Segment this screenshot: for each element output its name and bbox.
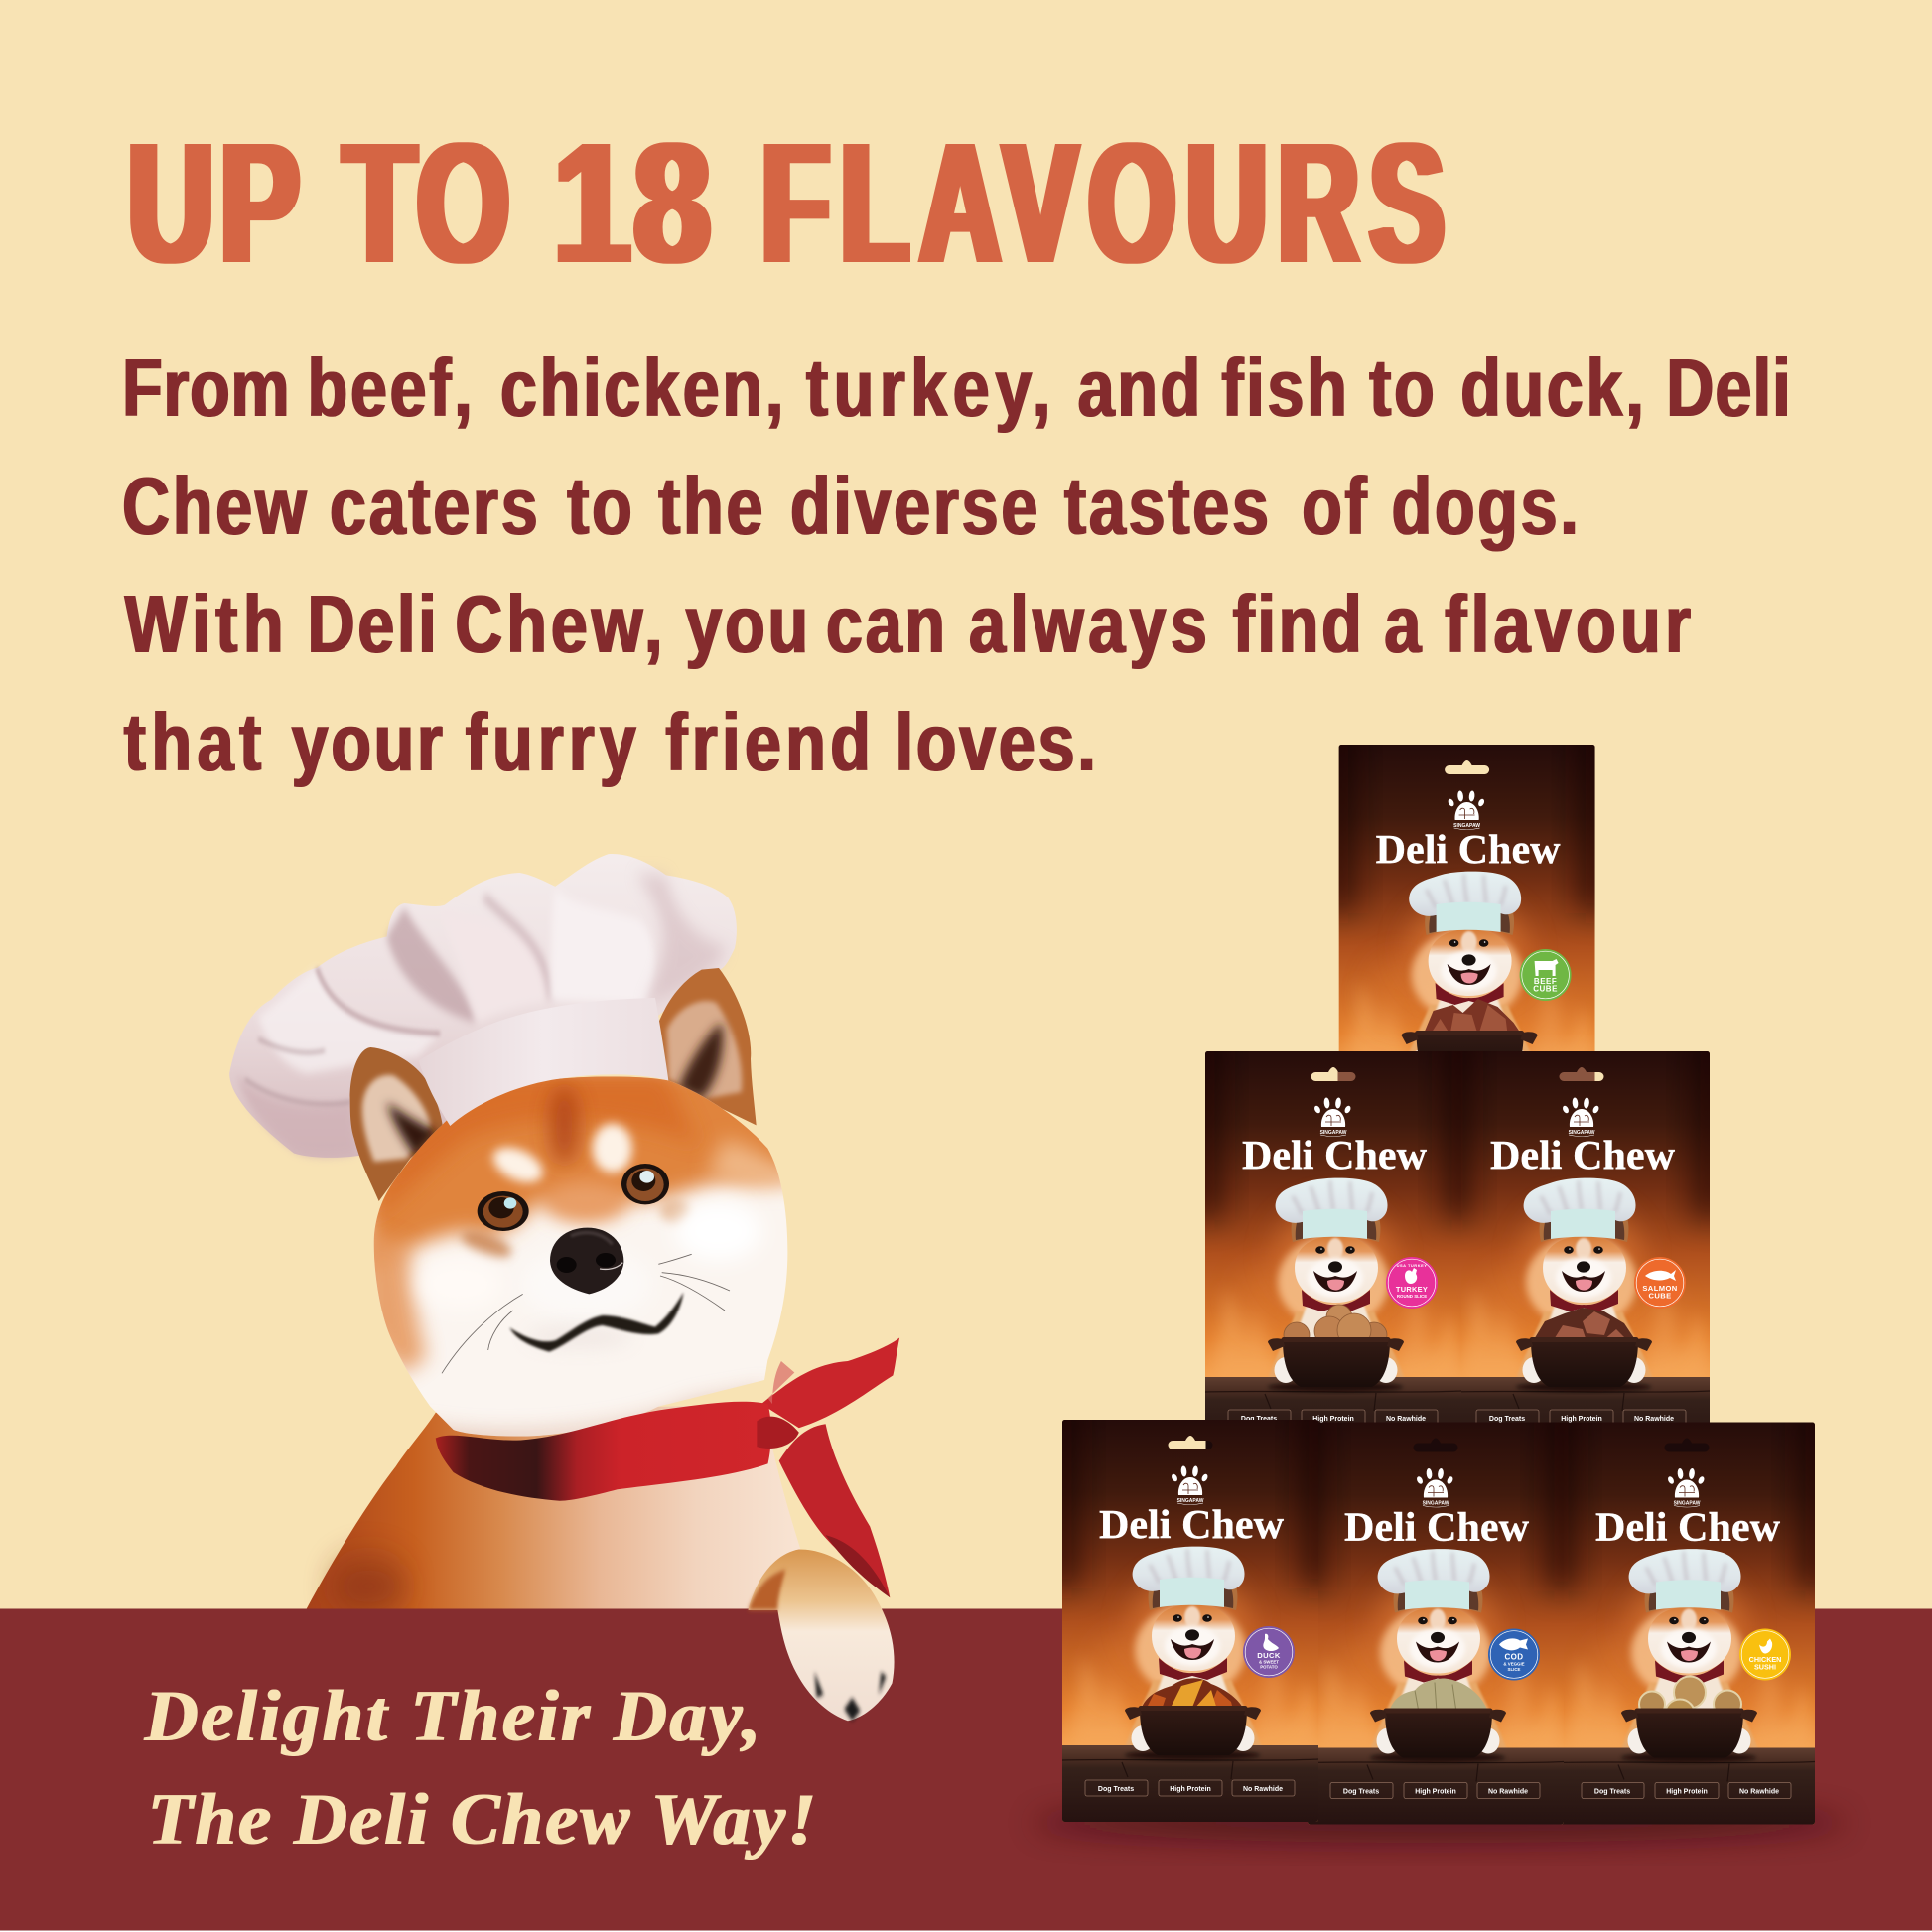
dog head <box>350 968 797 1456</box>
title: TO <box>344 107 509 299</box>
food: chicken sushi <box>1639 1676 1741 1729</box>
brand logo <box>1562 1097 1600 1136</box>
flavour badge: salmon cube: CUBE <box>1648 1291 1672 1301</box>
pack: cod and veggie slice (bottom middle) <box>1288 1402 1584 1825</box>
hang hole <box>1559 1067 1604 1081</box>
claim chips: No Rawhide <box>1739 1789 1779 1795</box>
right ear <box>658 968 757 1125</box>
claim chips <box>1362 1105 1572 1121</box>
burgundy band <box>0 1608 1932 1930</box>
flavour badge: chicken sushi: SUSHI <box>1754 1662 1776 1672</box>
illustration: shiba chef dog body and hat <box>229 854 817 1615</box>
claim chips: High Protein <box>1666 1789 1708 1795</box>
head fur <box>373 1076 788 1437</box>
dog paw over band <box>748 1549 895 1721</box>
body text: the <box>658 460 786 552</box>
hat band <box>419 998 668 1126</box>
dog nose <box>550 1228 623 1294</box>
flavour badge: duck and sweet potato: DUCK <box>1257 1651 1281 1660</box>
body text: Deli <box>1666 342 1792 434</box>
claim chips <box>1582 1783 1791 1799</box>
body text: find <box>1233 578 1386 670</box>
body text: caters <box>330 460 562 552</box>
body text: can <box>826 578 969 670</box>
hang hole <box>1311 1067 1356 1081</box>
brand logo <box>1667 1468 1706 1507</box>
body text: furry <box>466 696 665 788</box>
body text: a <box>1384 578 1445 670</box>
dog mouth and whiskers <box>442 1254 730 1373</box>
claim chips: High Protein <box>1447 1111 1487 1118</box>
claim chips: High Protein <box>1312 1416 1354 1423</box>
body text: Chew, <box>455 578 689 670</box>
pack: beef cube (top) <box>1319 725 1615 1147</box>
flavour badge: salmon cube <box>1634 1257 1686 1309</box>
product stack shadow <box>1033 1803 1847 1843</box>
body text: and <box>1078 342 1224 434</box>
food: cod slices <box>1389 1678 1488 1712</box>
body text: beef, <box>308 342 496 434</box>
body text: that <box>124 696 291 788</box>
product name: Deli Chew <box>1595 1503 1780 1549</box>
dog body <box>305 1404 817 1615</box>
brand logo: SINGAPAW <box>1453 823 1480 829</box>
claim chips: High Protein <box>1170 1786 1211 1793</box>
food: beef cubes <box>1424 999 1522 1035</box>
product name: Deli Chew <box>1099 1501 1284 1547</box>
flavour badge: turkey round slice: USA TURKEY <box>1397 1263 1427 1268</box>
body text: With <box>125 578 313 670</box>
pack: duck and sweet potato (bottom left) <box>1042 1400 1338 1822</box>
food: salmon cubes <box>1533 1308 1636 1341</box>
flavour badge: beef cube: CUBE <box>1533 985 1558 993</box>
body text: to <box>1369 342 1458 434</box>
body text: duck, <box>1460 342 1668 434</box>
brand logo <box>1313 1097 1352 1136</box>
brand logo <box>1416 1468 1454 1507</box>
claim chips: Dog Treats <box>1375 1111 1411 1118</box>
claim chips: No Rawhide <box>1634 1416 1674 1423</box>
product name: Deli Chew <box>1344 1503 1529 1549</box>
tagline: Delight Their Day, <box>144 1676 762 1757</box>
claim chips: High Protein <box>1415 1789 1456 1795</box>
flavour badge: beef cube: BEEF <box>1534 977 1557 986</box>
claim chips: Dog Treats <box>1098 1786 1134 1793</box>
body text: dogs. <box>1392 460 1582 552</box>
claim chips: No Rawhide <box>1243 1786 1283 1793</box>
claim chips <box>1228 1410 1438 1426</box>
brand logo <box>1171 1465 1209 1505</box>
title <box>128 106 1445 300</box>
flavour badge: beef cube <box>1520 949 1572 1001</box>
product name: Deli Chew <box>1490 1132 1675 1177</box>
body text: to <box>567 460 656 552</box>
body text: diverse <box>790 460 1061 552</box>
body text: Chew <box>122 460 331 552</box>
claim chips: Dog Treats <box>1594 1789 1630 1795</box>
body text: tastes <box>1064 460 1293 552</box>
claim chips: No Rawhide <box>1386 1416 1426 1423</box>
body text <box>122 342 1792 788</box>
body text: flavour <box>1445 578 1695 670</box>
tagline: The Deli Chew Way! <box>148 1779 818 1861</box>
hang hole <box>1414 1438 1457 1451</box>
brand logo: SINGAPAW <box>1674 1501 1701 1507</box>
flavour badge: salmon cube: SALMON <box>1642 1284 1678 1293</box>
flavour badge: cod and veggie slice <box>1488 1628 1540 1680</box>
claim chips: High Protein <box>1561 1416 1602 1423</box>
claim chips: No Rawhide <box>1488 1789 1528 1795</box>
chef hat <box>229 854 737 1158</box>
claim chips <box>1085 1780 1295 1796</box>
claim chips <box>1476 1410 1686 1426</box>
title: UP <box>128 107 300 299</box>
flavour badge: turkey round slice: ROUND SLICE <box>1397 1294 1427 1299</box>
body text: your <box>292 696 467 788</box>
body text: chicken, <box>500 342 807 434</box>
body text: of <box>1302 460 1391 552</box>
product name: Deli Chew <box>1242 1132 1427 1177</box>
hang hole <box>1168 1436 1213 1449</box>
pack: chicken sushi (bottom right) <box>1539 1402 1835 1825</box>
flavour badge: chicken sushi <box>1739 1628 1791 1680</box>
tagline <box>144 1676 818 1861</box>
body text: loves. <box>896 696 1099 788</box>
body text: friend <box>665 696 897 788</box>
title: 18 <box>554 107 711 300</box>
brand logo: SINGAPAW <box>1177 1498 1204 1504</box>
brand logo: SINGAPAW <box>1423 1501 1449 1507</box>
red neckerchief <box>436 1338 899 1597</box>
brand logo: SINGAPAW <box>1569 1130 1595 1136</box>
brand logo: SINGAPAW <box>1320 1130 1347 1136</box>
flavour badge: chicken sushi: CHICKEN <box>1749 1655 1781 1664</box>
flavour badge: turkey round slice <box>1386 1257 1438 1309</box>
body text: you <box>685 578 832 670</box>
flavour badge: cod and veggie slice: & VEGGIE <box>1503 1662 1525 1666</box>
claim chips: Dog Treats <box>1489 1416 1525 1423</box>
body text: Deli <box>308 578 461 670</box>
flavour badge: duck and sweet potato <box>1243 1626 1295 1678</box>
flavour badge: duck and sweet potato: & SWEET <box>1259 1660 1279 1664</box>
flavour badge: cod and veggie slice: SLICE <box>1508 1667 1521 1672</box>
flavour badge: cod and veggie slice: COD <box>1505 1652 1523 1662</box>
white bottom edge <box>0 1930 1932 1932</box>
body text: From <box>122 342 310 434</box>
product name: Deli Chew <box>1376 826 1561 872</box>
pack: salmon cube (middle right) <box>1434 1032 1729 1453</box>
body text: fish <box>1221 342 1371 434</box>
food: duck and sweet potato <box>1141 1678 1244 1710</box>
pack: turkey round slice (middle left) <box>1185 1032 1481 1453</box>
food: turkey slices <box>1284 1305 1387 1348</box>
hang hole <box>1445 760 1489 774</box>
title: FLAVOURS <box>761 106 1445 299</box>
flavour badge: turkey round slice: TURKEY <box>1396 1285 1428 1294</box>
claim chips: Dog Treats <box>1343 1789 1379 1795</box>
claim chips: No Rawhide <box>1520 1111 1560 1118</box>
dog eyes <box>478 1164 669 1231</box>
left ear <box>350 1047 443 1201</box>
claim chips: Dog Treats <box>1241 1416 1277 1423</box>
body text: turkey, <box>806 342 1080 434</box>
flavour badge: duck and sweet potato: POTATO <box>1260 1664 1278 1670</box>
body text: always <box>969 578 1234 670</box>
brand logo <box>1447 790 1485 830</box>
hang hole <box>1664 1438 1710 1451</box>
claim chips <box>1330 1783 1540 1799</box>
